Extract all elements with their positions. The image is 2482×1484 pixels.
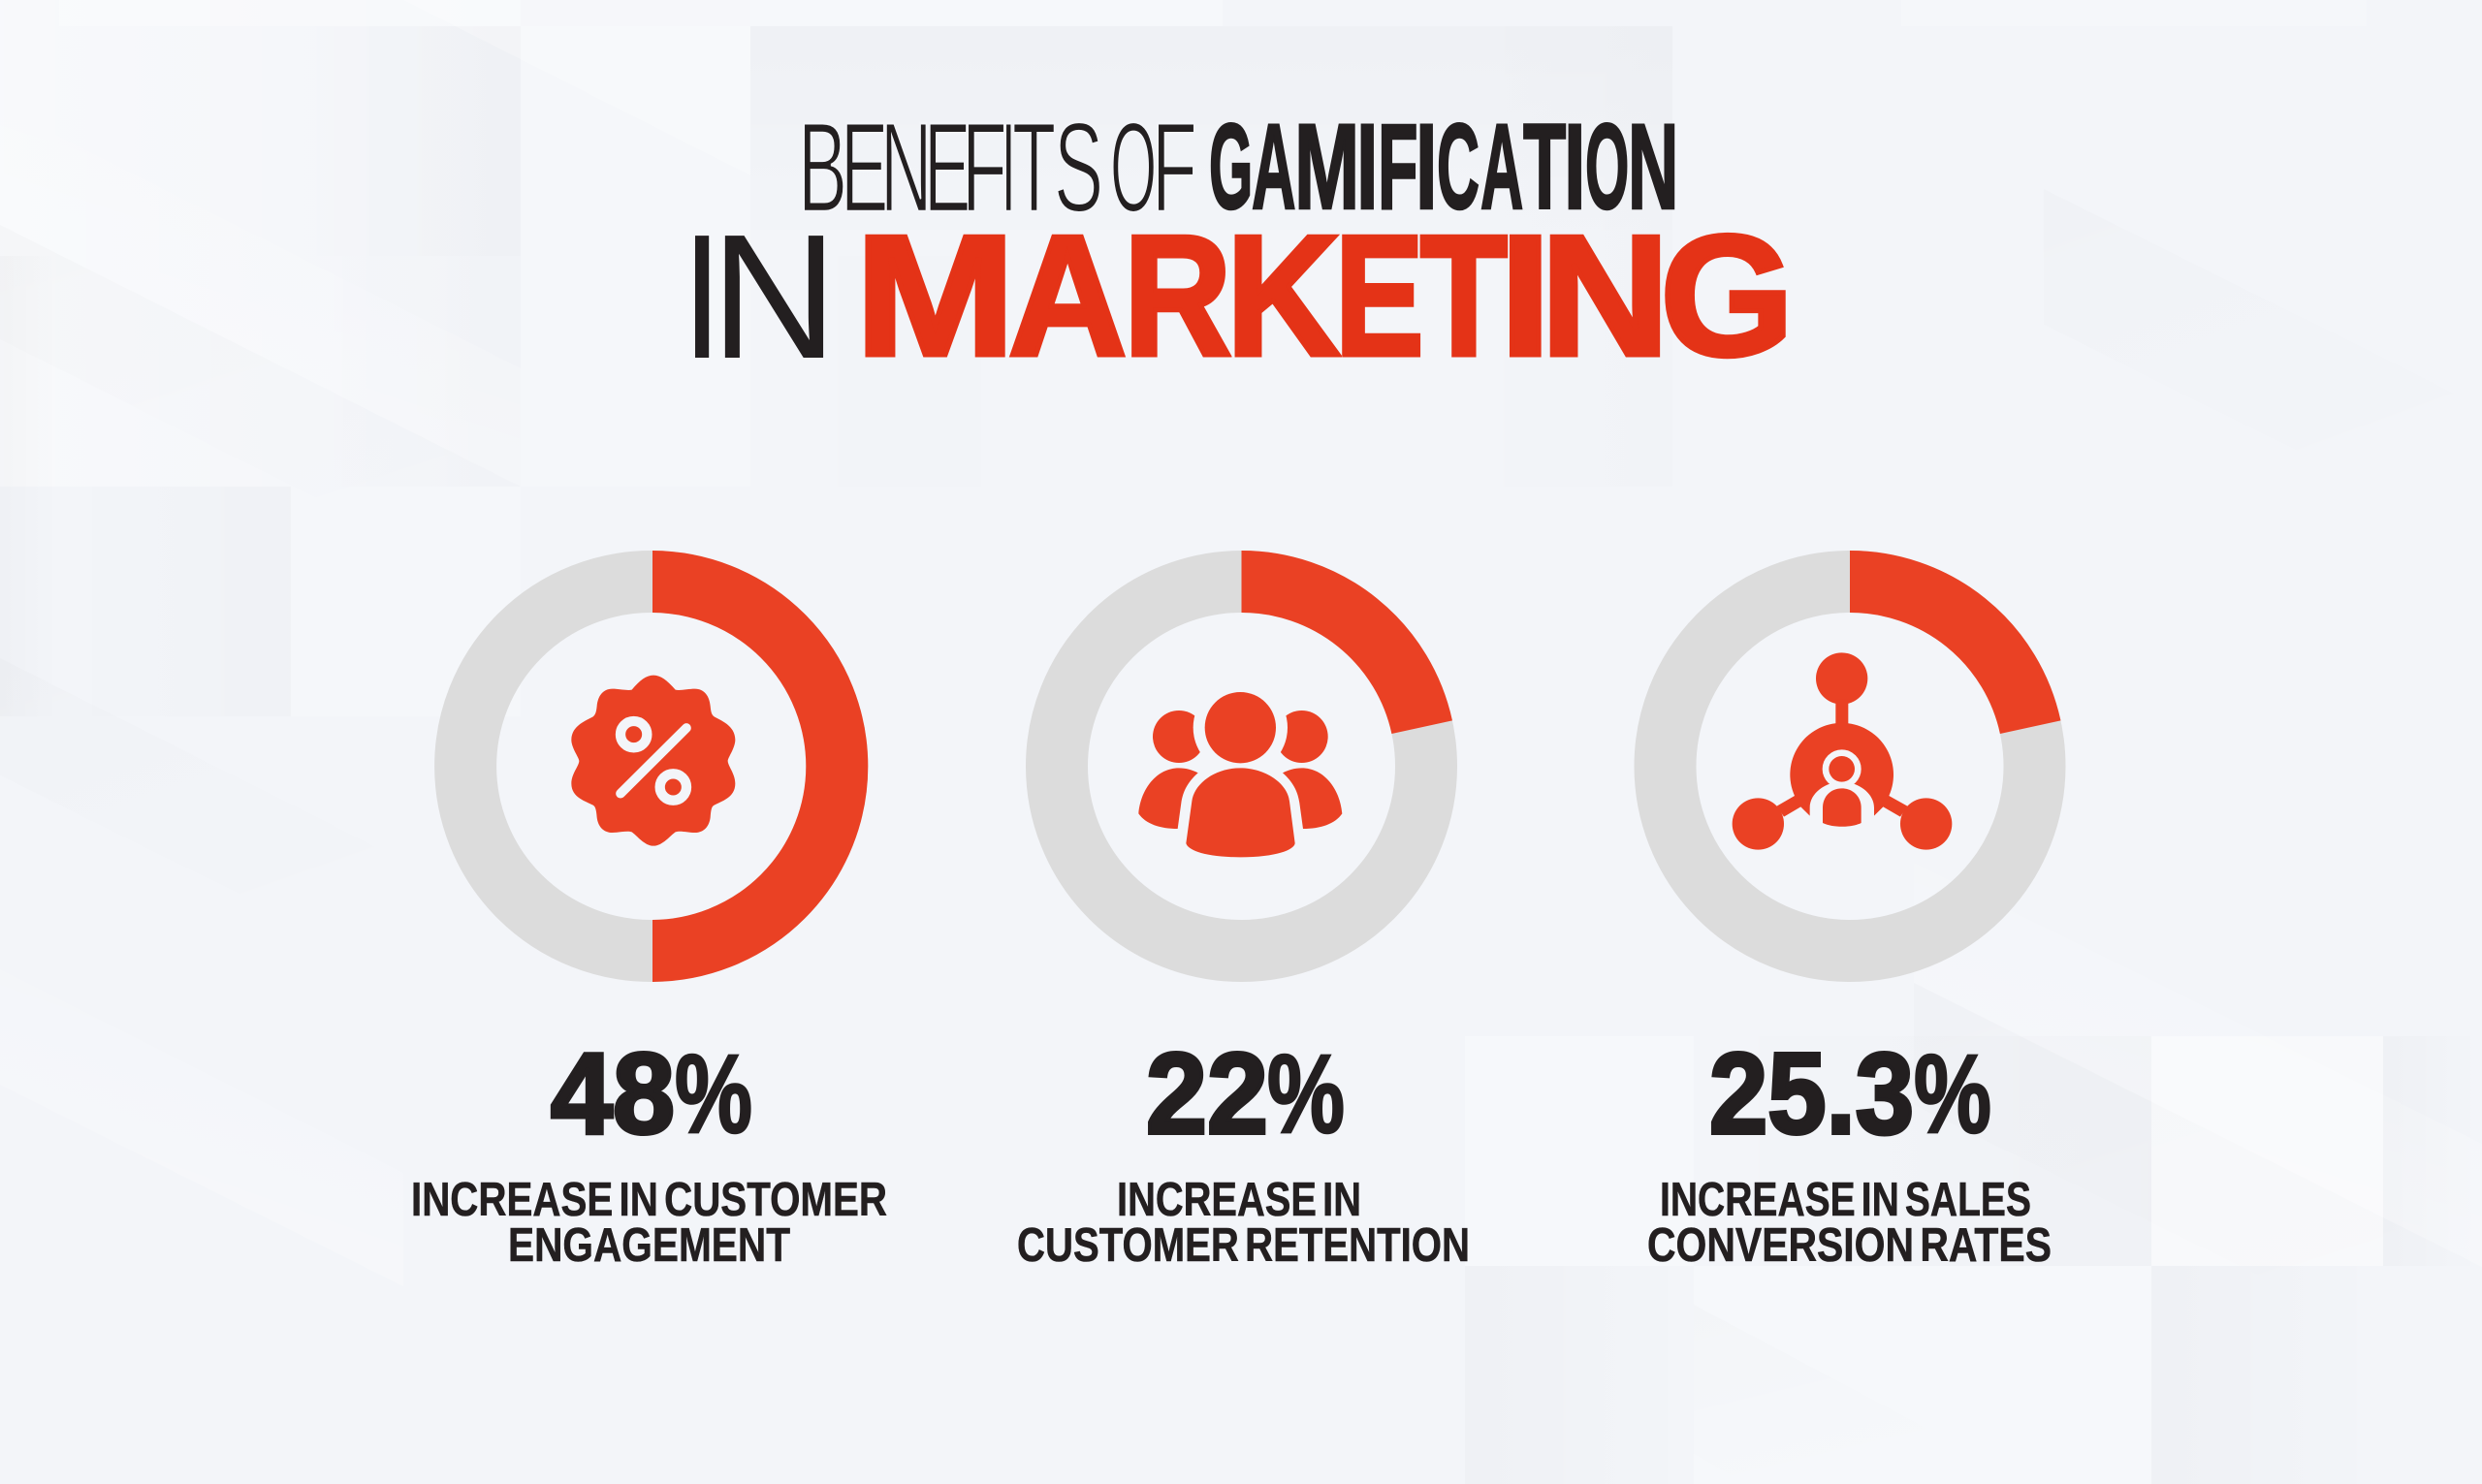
stat value <box>1146 1029 1345 1158</box>
title line 1: thin words: E <box>924 96 971 238</box>
panel: sales conversion stat <box>1647 582 2052 1272</box>
stat label: INCREASE IN CUSTOMER <box>411 1174 887 1226</box>
title line 1: thin words: F <box>962 96 1007 238</box>
title line 2: red word: K <box>1226 200 1340 392</box>
title line 2: red word: E <box>1335 200 1423 392</box>
stat label <box>411 1174 887 1272</box>
title line 1: bold word: A <box>1252 100 1295 235</box>
title line 1: bold word: I <box>1356 100 1379 235</box>
title line 1: bold word: T <box>1523 100 1567 235</box>
title line 1: bold word: I <box>1416 100 1437 235</box>
title line 2: red word: R <box>1124 200 1231 392</box>
title line 1: bold word: N <box>1628 100 1678 235</box>
title line 2: red word: M <box>855 200 1016 392</box>
title line 1: bold word: O <box>1585 100 1629 235</box>
stat label: INCREASE IN SALES <box>1660 1174 2031 1226</box>
stat label: CUSTOMER RETENTION <box>1017 1219 1470 1272</box>
title line 1: thin words: F <box>1152 96 1197 238</box>
title line 1: bold word: C <box>1437 100 1480 235</box>
title line 1: bold word: F <box>1378 100 1418 235</box>
panel: customer engagement stat <box>411 582 887 1272</box>
title line 1: thin words: B <box>798 96 847 238</box>
title line 2: thin word: N <box>711 197 838 395</box>
title line 2: red word <box>855 200 1794 392</box>
title line 2: red word: T <box>1420 200 1508 392</box>
stat label: CONVERSION RATES <box>1647 1219 2052 1272</box>
title line 1: bold word <box>1209 100 1678 235</box>
stat label: INCREASE IN <box>1117 1174 1361 1226</box>
icon: group of people <box>1138 680 1342 857</box>
donut chart: 48% <box>465 582 837 951</box>
donut chart: 22% <box>1057 582 1426 951</box>
title line 2: thin word: I <box>682 197 722 395</box>
title <box>682 96 1794 395</box>
title line 1: thin words: I <box>1001 96 1016 238</box>
title line 2: red word: G <box>1660 200 1794 392</box>
icon: user network hub <box>1733 652 1952 850</box>
stat value <box>551 1029 752 1158</box>
title line 2: red word: I <box>1500 200 1551 392</box>
title line 1: bold word: M <box>1294 100 1359 235</box>
title line 1: bold word: I <box>1564 100 1586 235</box>
stat value: 25.3 <box>1709 1029 1914 1158</box>
title line 1: bold word: A <box>1480 100 1523 235</box>
title line 1: thin words: O <box>1110 96 1157 238</box>
stat value: % <box>675 1032 752 1156</box>
stat label: ENGAGEMENT <box>508 1219 790 1272</box>
title line 1: thin words <box>798 96 1197 238</box>
title line 1: thin words: N <box>880 96 932 238</box>
stat value: % <box>1914 1032 1991 1156</box>
panel: customer retention stat <box>1017 582 1470 1272</box>
title line 1: thin words: S <box>1053 96 1103 238</box>
title line 1: bold word: G <box>1209 100 1253 235</box>
donut chart: 25.3% <box>1666 582 2034 951</box>
title line 1: thin words: T <box>1012 96 1057 238</box>
stat label <box>1647 1174 2052 1272</box>
title line 1: thin words: E <box>841 96 888 238</box>
title line 2: red word: A <box>1008 200 1128 392</box>
stat value: % <box>1267 1032 1345 1156</box>
icon: percent badge <box>571 676 735 846</box>
stat value: 48 <box>551 1029 675 1158</box>
stat label <box>1017 1174 1470 1272</box>
stat value: 22 <box>1146 1029 1268 1158</box>
title line 2: red word: N <box>1541 200 1670 392</box>
